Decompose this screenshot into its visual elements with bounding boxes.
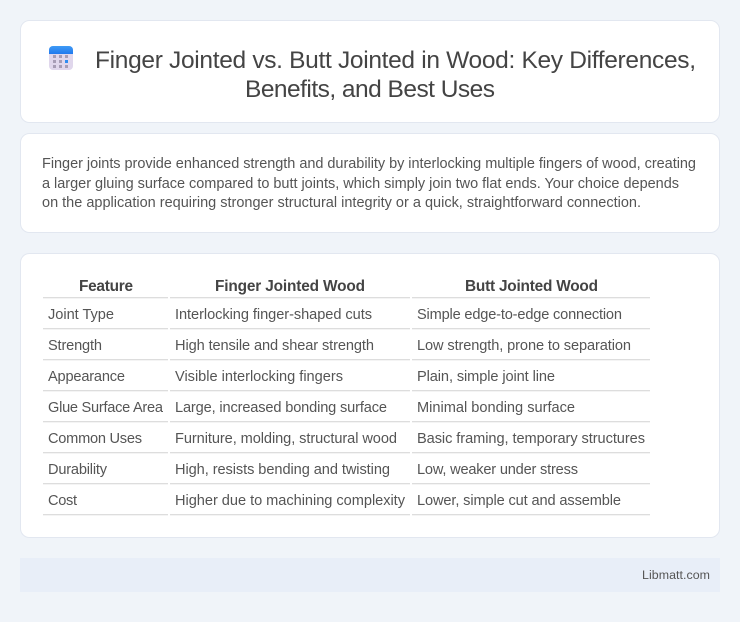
row: common uses: Basic framing, temporary structures — [417, 431, 645, 447]
panel: comparison table — [20, 254, 720, 538]
row: cost — [48, 493, 621, 509]
row: strength: Low strength, prone to separation — [417, 338, 631, 354]
row: strength — [48, 338, 631, 354]
row: joint type: Interlocking finger-shaped cuts — [175, 307, 372, 323]
row: durability: Low, weaker under stress — [417, 462, 578, 478]
row: cost: Higher due to machining complexity — [175, 493, 406, 509]
row: glue surface area: Large, increased bonding surface — [175, 400, 387, 416]
row: durability: Durability — [48, 462, 108, 478]
footer: Libmatt.com — [642, 568, 710, 582]
panel: header — [20, 20, 720, 122]
table header row: Butt Jointed Wood — [465, 278, 598, 295]
footer — [20, 558, 720, 592]
text block: summary paragraph: Finger joints provide enhanced strength and durability by interlocking multiple fingers of wood, creating — [42, 156, 696, 172]
icon: calendar — [49, 46, 73, 70]
row: joint type: Simple edge-to-edge connection — [417, 307, 622, 323]
row: appearance: Plain, simple joint line — [417, 369, 555, 385]
row: glue surface area: Minimal bonding surface — [417, 400, 575, 416]
row: glue surface area — [48, 400, 575, 416]
row: cost: Cost — [48, 493, 77, 509]
table header row — [79, 278, 598, 295]
table header row: Finger Jointed Wood — [215, 278, 365, 295]
row: joint type: Joint Type — [48, 307, 114, 323]
row: appearance: Visible interlocking fingers — [175, 369, 343, 385]
title: Finger Jointed vs. Butt Jointed in Wood: Key Differences, — [95, 47, 696, 74]
row: common uses — [48, 431, 645, 447]
panel: summary — [20, 134, 720, 232]
row: strength: High tensile and shear strength — [175, 338, 374, 354]
row: strength: Strength — [48, 338, 102, 354]
row: durability — [48, 462, 578, 478]
title — [95, 47, 696, 103]
row: glue surface area: Glue Surface Area — [48, 400, 164, 416]
row: common uses: Common Uses — [48, 431, 142, 447]
text block: summary paragraph: a larger gluing surface compared to butt joints, which simply join two flat ends. Your choice depends — [42, 176, 679, 192]
text block: summary paragraph — [42, 156, 696, 211]
row: joint type — [48, 307, 622, 323]
text block: summary paragraph: on the application requiring stronger structural integrity or a quick, straightforward connection. — [42, 195, 641, 211]
row: common uses: Furniture, molding, structural wood — [175, 431, 397, 447]
row: durability: High, resists bending and twisting — [175, 462, 390, 478]
table header row: Feature — [79, 278, 133, 295]
row: appearance: Appearance — [48, 369, 125, 385]
title: Benefits, and Best Uses — [245, 76, 495, 103]
row: cost: Lower, simple cut and assemble — [417, 493, 621, 509]
row: appearance — [48, 369, 555, 385]
